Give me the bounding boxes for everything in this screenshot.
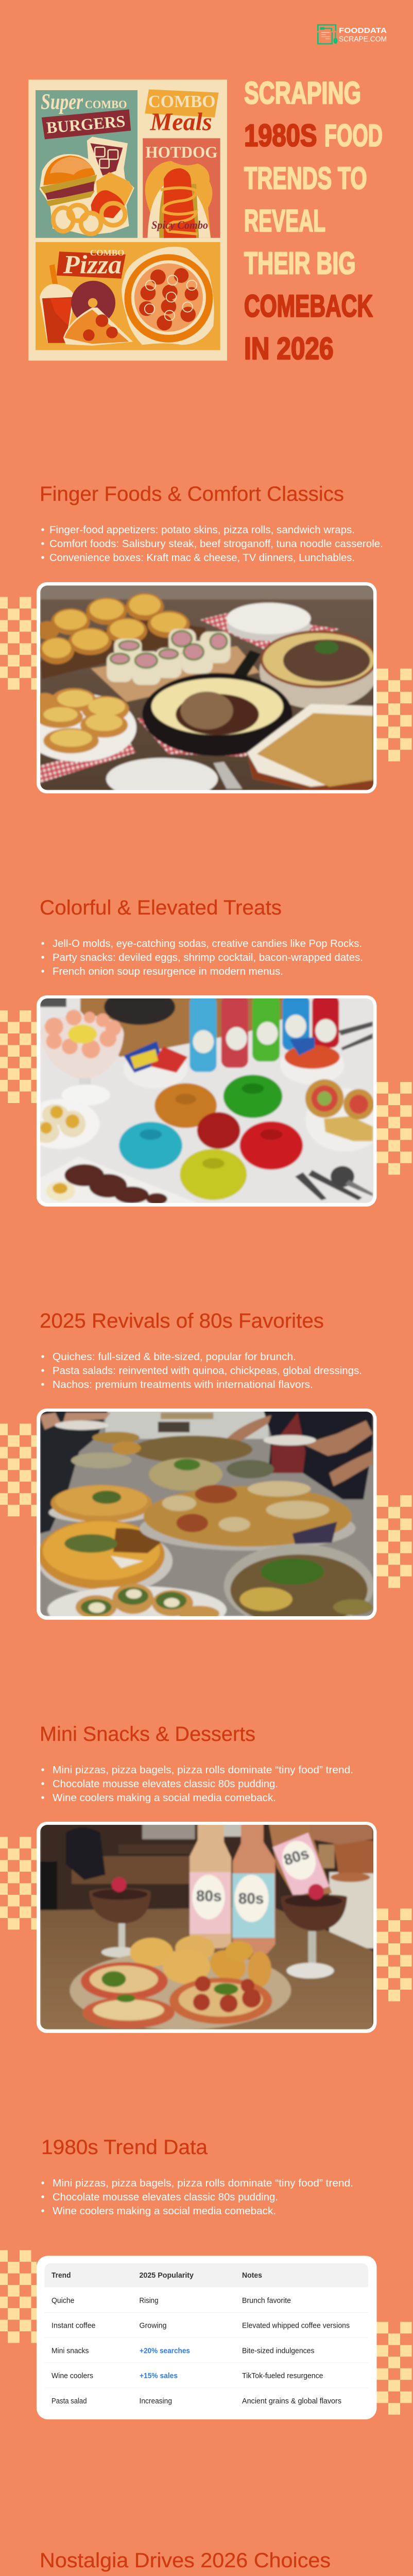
panel: burgers: BURGERS (46, 112, 126, 137)
bullet list: trend data (41, 2177, 353, 2217)
table row: wine coolers: TikTok-fueled resurgence (242, 2372, 323, 2380)
title: FOOD (324, 118, 383, 153)
checker pattern left 4 (0, 1837, 37, 1929)
table row: mini snacks: Bite-sized indulgences (242, 2347, 314, 2355)
photo frame: mini pizzas and coolers: 80s (238, 1890, 264, 1907)
checker pattern left 3 (0, 1423, 37, 1516)
panel: combo meals: COMBO (148, 92, 215, 111)
brand logo: top right: SCRAPE.COM (339, 35, 387, 44)
table row: mini snacks: +20% searches (140, 2347, 190, 2355)
bullet list: mini snacks: Wine coolers making a social media comeback. (53, 1792, 276, 1804)
bullet list: treats: Jell-O molds, eye-catching sodas, creative candies like Pop Rocks. (53, 938, 362, 950)
title: THEIR BIG (244, 246, 356, 281)
bullet list: finger foods: Comfort foods: Salisbury steak, beef stroganoff, tuna noodle casserole. (49, 538, 383, 550)
table row: instant coffee: Growing (139, 2321, 167, 2330)
bullet list: trend data: Wine coolers making a social media comeback. (53, 2205, 276, 2217)
checker pattern right 4 (377, 1908, 412, 2001)
bullet list: revivals (41, 1351, 362, 1391)
bullet list: trend data: Chocolate mousse elevates classic 80s pudding. (53, 2191, 278, 2203)
heading: finger foods: Finger Foods & Comfort Classics (40, 483, 344, 505)
table row: quiche: Quiche (51, 2297, 74, 2305)
panel: hotdog: Spicy Combo (151, 218, 208, 231)
checker pattern right 1 (377, 669, 412, 761)
table header: 2025 Popularity (139, 2272, 194, 2280)
photo frame: buffet (37, 1409, 377, 1633)
heading: trend data: 1980s Trend Data (41, 2136, 208, 2159)
brand logo: top right: FOODDATA (339, 26, 387, 35)
brand logo: top right (317, 24, 387, 44)
bullet list: finger foods (41, 524, 383, 564)
title: IN 2026 (244, 331, 334, 366)
icon: logo mark (317, 24, 337, 44)
panel: hotdog: HOTDOG (145, 143, 217, 161)
table row: pasta salad: Ancient grains & global flavors (242, 2397, 341, 2405)
panel: pizza: Pizza (63, 250, 122, 280)
panel: burgers: Super (41, 90, 83, 114)
heading: nostalgia: Nostalgia Drives 2026 Choices (40, 2549, 331, 2572)
title: REVEAL (244, 204, 325, 238)
checker pattern right 3 (377, 1495, 412, 1588)
table row: wine coolers: +15% sales (140, 2372, 178, 2380)
checker pattern left 5 (0, 2250, 37, 2343)
panel: hotdog (143, 138, 220, 238)
retro poster illustration (28, 80, 227, 361)
heading: revivals: 2025 Revivals of 80s Favorites (40, 1310, 324, 1332)
table row: instant coffee (51, 2321, 350, 2330)
data table card (37, 2256, 377, 2419)
checker pattern right 5 (377, 2322, 412, 2415)
table row: quiche: Rising (139, 2297, 159, 2305)
photo frame: jello and sodas (22, 989, 385, 1207)
table row: quiche: Brunch favorite (242, 2297, 291, 2305)
title (244, 76, 383, 366)
photo frame: mini pizzas and coolers: 80s (282, 1845, 311, 1869)
bullet list: treats: French onion soup resurgence in modern menus. (53, 965, 283, 977)
table row: pasta salad (51, 2397, 341, 2405)
bullet list: revivals: Quiches: full-sized & bite-sized, popular for brunch. (53, 1351, 296, 1363)
table row: mini snacks (51, 2347, 314, 2355)
bullet list: revivals: Pasta salads: reinvented with quinoa, chickpeas, global dressings. (53, 1365, 362, 1377)
table row: mini snacks: Mini snacks (51, 2347, 89, 2355)
panel: pizza: COMBO (90, 248, 124, 258)
table header (51, 2272, 262, 2280)
bullet list: treats (41, 938, 363, 977)
bullet list: finger foods: Finger-food appetizers: potato skins, pizza rolls, sandwich wraps. (49, 524, 355, 536)
panel: combo meals: Meals (150, 108, 212, 136)
photo frame: mini pizzas and coolers: 80s (196, 1888, 222, 1905)
table row: wine coolers (51, 2372, 323, 2380)
photo frame: finger foods table (22, 582, 378, 800)
panel: burgers (36, 90, 137, 238)
table header: Trend (51, 2272, 71, 2280)
table row: instant coffee: Elevated whipped coffee versions (242, 2321, 350, 2330)
bullet list: finger foods: Convenience boxes: Kraft mac & cheese, TV dinners, Lunchables. (49, 552, 355, 564)
table row: pasta salad: Pasta salad (51, 2397, 87, 2405)
bullet list: trend data: Mini pizzas, pizza bagels, pizza rolls dominate “tiny food” trend. (53, 2177, 353, 2189)
table row: pasta salad: Increasing (139, 2397, 172, 2405)
checker pattern right 2 (377, 1082, 412, 1175)
photo frame: mini pizzas and coolers (37, 1822, 377, 2033)
title: 1980S (244, 118, 317, 153)
panel: pizza (36, 242, 220, 350)
heading: mini snacks: Mini Snacks & Desserts (40, 1723, 255, 1745)
bullet list: treats: Party snacks: deviled eggs, shrimp cocktail, bacon-wrapped dates. (53, 952, 363, 963)
heading: colorful treats: Colorful & Elevated Treats (40, 896, 282, 919)
table row: quiche (51, 2297, 291, 2305)
bullet list: mini snacks: Mini pizzas, pizza bagels, pizza rolls dominate “tiny food” trend. (53, 1764, 353, 1776)
bullet list: mini snacks (41, 1764, 353, 1804)
bullet list: mini snacks: Chocolate mousse elevates classic 80s pudding. (53, 1778, 278, 1790)
title: SCRAPING (244, 76, 361, 110)
checker pattern left 2 (0, 1010, 37, 1103)
panel: burgers: COMBO (85, 98, 127, 111)
checker pattern left 1 (0, 597, 37, 690)
panel: combo meals (145, 89, 219, 136)
bullet list: revivals: Nachos: premium treatments with international flavors. (53, 1379, 313, 1391)
table row: instant coffee: Instant coffee (51, 2321, 96, 2330)
table row: wine coolers: Wine coolers (51, 2372, 93, 2380)
table header: Notes (242, 2272, 262, 2280)
